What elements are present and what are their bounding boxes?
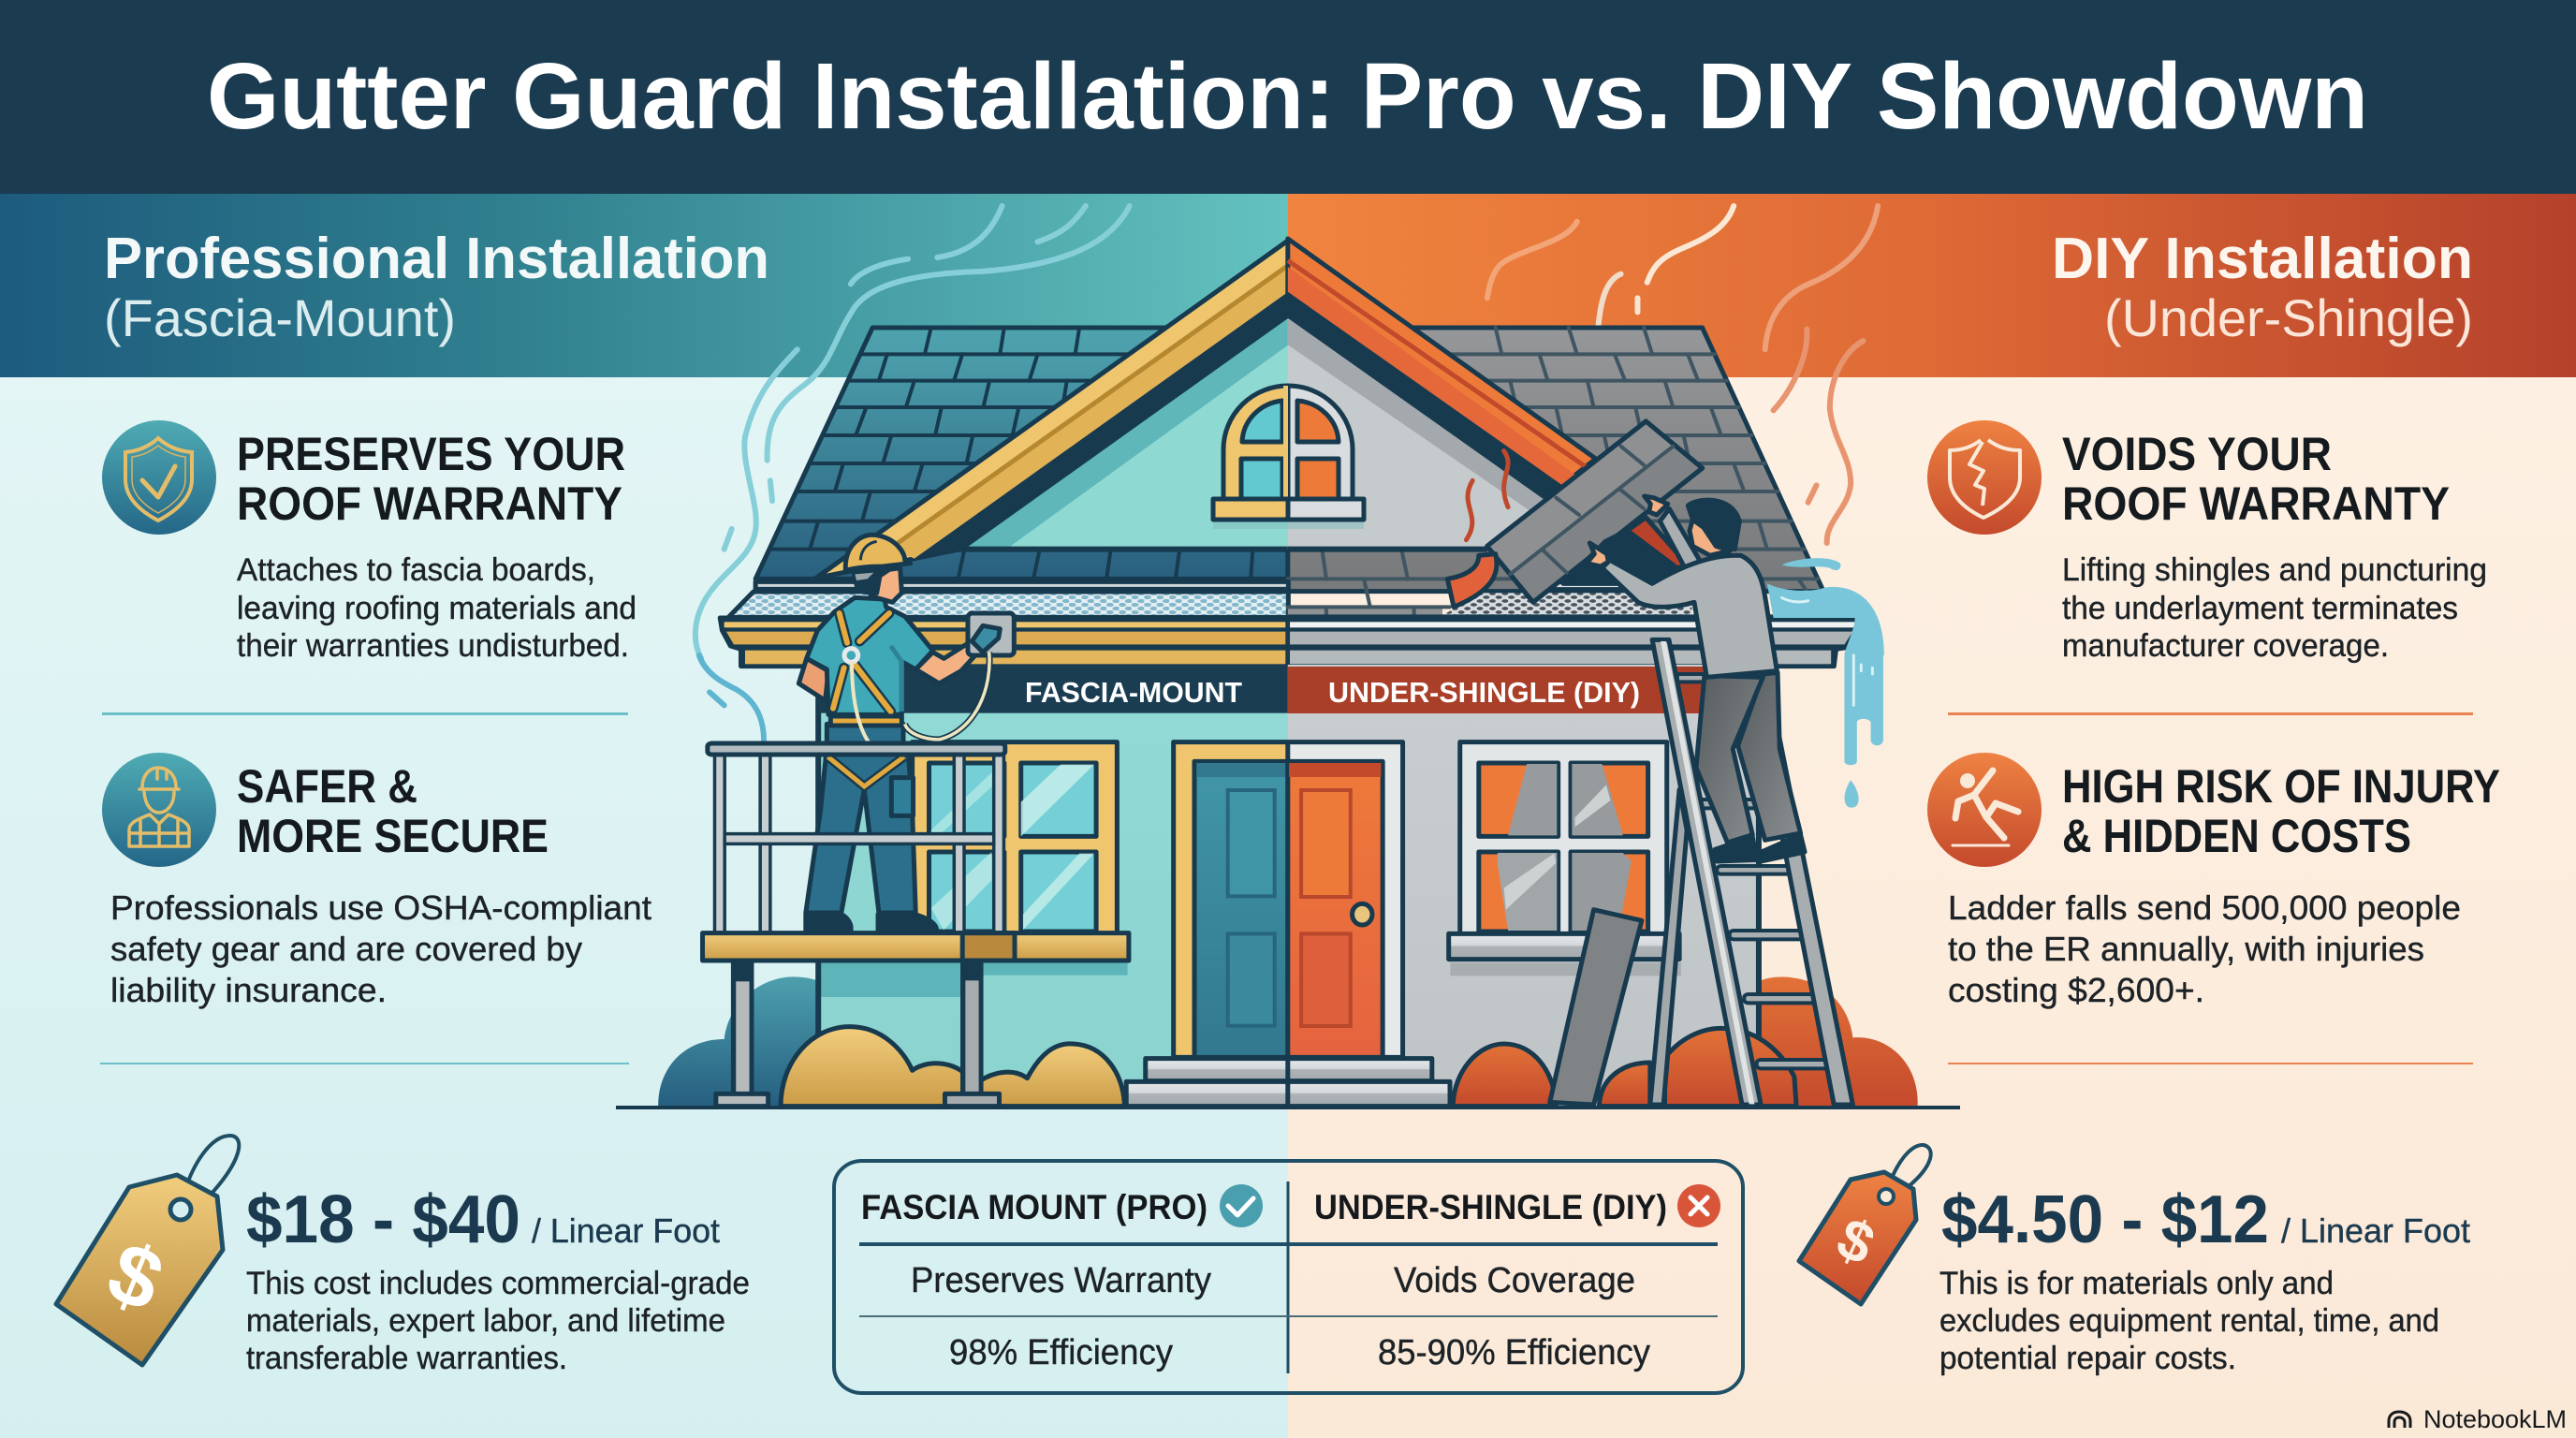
body text: liability insurance. bbox=[110, 971, 387, 1009]
heading: HIGH RISK OF INJURY bbox=[2062, 760, 2500, 813]
panel: voids your roof warranty bbox=[1927, 420, 2487, 664]
heading bbox=[237, 760, 549, 862]
door: teal bbox=[1174, 742, 1288, 1057]
wind swirls: right bbox=[1487, 206, 1878, 543]
DIY person: legs bbox=[1696, 672, 1805, 861]
body text bbox=[110, 888, 651, 1009]
cost description: potential repair costs. bbox=[1939, 1341, 2236, 1376]
column header: fascia mount: FASCIA MOUNT (PRO) bbox=[861, 1188, 1208, 1226]
roof trim: orange rake board bbox=[1288, 239, 1596, 498]
banner label: under-shingle bbox=[1288, 667, 1705, 713]
heading: SAFER & bbox=[237, 760, 417, 813]
icon: worker in hard hat bbox=[102, 753, 216, 867]
NotebookLM watermark: NotebookLM bbox=[2423, 1405, 2567, 1433]
price unit: / Linear Foot bbox=[2281, 1211, 2470, 1250]
column header: under-shingle: UNDER-SHINGLE (DIY) bbox=[1314, 1188, 1667, 1226]
scaffold platform bbox=[703, 743, 1129, 1107]
cost description: This is for materials only and bbox=[1939, 1266, 2334, 1301]
heading: & HIDDEN COSTS bbox=[2062, 810, 2411, 862]
tag dollar sign: $ bbox=[95, 1224, 175, 1330]
banner label: fascia-mount bbox=[818, 665, 1288, 713]
icon: shield check bbox=[102, 420, 216, 535]
worker upper body and harness bbox=[798, 535, 1014, 744]
banner text: under-shingle: UNDER-SHINGLE (DIY) bbox=[1328, 676, 1640, 709]
heading bbox=[237, 428, 625, 530]
panel: professional cost bbox=[56, 1136, 750, 1376]
roof trim: gold rake board bbox=[816, 241, 1288, 578]
subheading: fascia-mount: (Fascia-Mount) bbox=[104, 288, 456, 347]
house illustration bbox=[616, 206, 1960, 1109]
banner text: fascia-mount: FASCIA-MOUNT bbox=[1025, 676, 1242, 709]
gutter guard mesh and gutter: left bbox=[720, 581, 1288, 667]
icon: check bbox=[1220, 1184, 1263, 1227]
body text: Attaches to fascia boards, bbox=[237, 552, 595, 588]
icon: gold price tag bbox=[56, 1136, 239, 1365]
bush: teal background bbox=[658, 976, 820, 1107]
icon: cross bbox=[1677, 1184, 1720, 1227]
heading bbox=[2062, 760, 2500, 862]
window with curtains bbox=[1449, 742, 1681, 976]
heading: ROOF WARRANTY bbox=[2062, 477, 2450, 530]
body text: Ladder falls send 500,000 people bbox=[1948, 888, 2461, 927]
shrubs: orange bbox=[1453, 1028, 1796, 1107]
gable window bbox=[1213, 386, 1364, 529]
comparison table bbox=[834, 1161, 1743, 1393]
water overflow: drips bbox=[1844, 655, 1883, 808]
stack of lifted shingles bbox=[1447, 421, 1703, 607]
icon: orange price tag bbox=[1799, 1145, 1931, 1304]
worker: professional installer bbox=[798, 535, 1014, 930]
background: professional side bbox=[0, 377, 1288, 1438]
background: DIY side bbox=[1288, 377, 2576, 1438]
tag dollar sign: $ bbox=[1828, 1206, 1883, 1278]
price: $18 - $40 bbox=[246, 1182, 520, 1257]
heading: ROOF WARRANTY bbox=[237, 477, 622, 530]
gable wall: grey bbox=[1288, 314, 1545, 550]
body text: manufacturer coverage. bbox=[2062, 628, 2389, 664]
cost description: transferable warranties. bbox=[246, 1341, 567, 1376]
body text: safety gear and are covered by bbox=[110, 930, 582, 968]
body text: leaving roofing materials and bbox=[237, 591, 637, 626]
price: $4.50 - $12 bbox=[1941, 1182, 2269, 1257]
title: Gutter Guard Installation: Pro vs. DIY Showdown bbox=[207, 44, 2368, 149]
cost description bbox=[246, 1266, 750, 1376]
entry steps: orange side bbox=[1288, 1059, 1450, 1107]
warranty row bbox=[911, 1261, 1635, 1300]
heading: DIY installation: DIY Installation bbox=[2052, 227, 2473, 291]
cost description: excludes equipment rental, time, and bbox=[1939, 1303, 2439, 1339]
heading: PRESERVES YOUR bbox=[237, 428, 625, 480]
body text: costing $2,600+. bbox=[1948, 971, 2204, 1009]
heading: professional installation: Professional Installation bbox=[104, 227, 769, 291]
icon: cracked shield bbox=[1927, 420, 2042, 535]
efficiency row: 85-90% Efficiency bbox=[1378, 1333, 1650, 1372]
body text: the underlayment terminates bbox=[2062, 591, 2458, 626]
shrubs: gold bbox=[781, 1027, 1124, 1107]
body text: their warranties undisturbed. bbox=[237, 628, 629, 664]
body text: Professionals use OSHA-compliant bbox=[110, 888, 651, 927]
door: orange bbox=[1288, 742, 1403, 1057]
cost description: This cost includes commercial-grade bbox=[246, 1266, 750, 1301]
bush: orange background bbox=[1759, 977, 1918, 1107]
heading bbox=[2062, 428, 2450, 530]
efficiency row: 98% Efficiency bbox=[949, 1333, 1173, 1372]
title banner bbox=[0, 0, 2576, 194]
subheading: under-shingle: (Under-Shingle) bbox=[2104, 288, 2473, 347]
body text: to the ER annually, with injuries bbox=[1948, 930, 2424, 968]
panel: DIY cost bbox=[1799, 1145, 2470, 1376]
panel: high risk of injury and hidden costs bbox=[1927, 753, 2500, 1009]
house wall: grey bbox=[1288, 665, 1759, 1107]
warranty row: Voids Coverage bbox=[1394, 1261, 1635, 1300]
house wall: teal bbox=[818, 665, 1288, 1107]
body text: Lifting shingles and puncturing bbox=[2062, 552, 2487, 588]
heading: MORE SECURE bbox=[237, 810, 549, 862]
efficiency row bbox=[949, 1333, 1650, 1372]
ground line bbox=[616, 1106, 1960, 1109]
leaning shingle board bbox=[1550, 910, 1642, 1105]
cost description: materials, expert labor, and lifetime bbox=[246, 1303, 725, 1339]
damaged shingles and mesh: right bbox=[1288, 582, 1858, 667]
ladder bbox=[1650, 639, 1852, 1105]
body text bbox=[2062, 552, 2487, 664]
window: teal side bbox=[913, 742, 1117, 934]
heading: VOIDS YOUR bbox=[2062, 428, 2332, 480]
panel header: professional installation bbox=[0, 194, 1288, 377]
roof: grey shingles bbox=[1288, 328, 1823, 607]
panel: preserves your roof warranty bbox=[102, 420, 637, 664]
DIY person: upper body bbox=[1563, 496, 1777, 677]
wind swirls: left bbox=[695, 206, 1130, 741]
cost description bbox=[1939, 1266, 2439, 1376]
water overflow: waterfall bbox=[1767, 558, 1884, 655]
panel header: DIY installation bbox=[1288, 194, 2576, 377]
entry steps: teal side bbox=[1126, 1059, 1288, 1107]
roof: teal shingles bbox=[755, 328, 1288, 579]
warranty row: Preserves Warranty bbox=[911, 1261, 1211, 1300]
panel: safer and more secure bbox=[102, 753, 651, 1009]
body text bbox=[237, 552, 637, 664]
gable wall: teal bbox=[906, 312, 1288, 550]
heat squiggles bbox=[1466, 451, 1508, 540]
icon: falling person bbox=[1927, 753, 2042, 867]
worker legs bbox=[806, 749, 937, 930]
body text bbox=[1948, 888, 2461, 1009]
price unit: / Linear Foot bbox=[532, 1211, 720, 1250]
